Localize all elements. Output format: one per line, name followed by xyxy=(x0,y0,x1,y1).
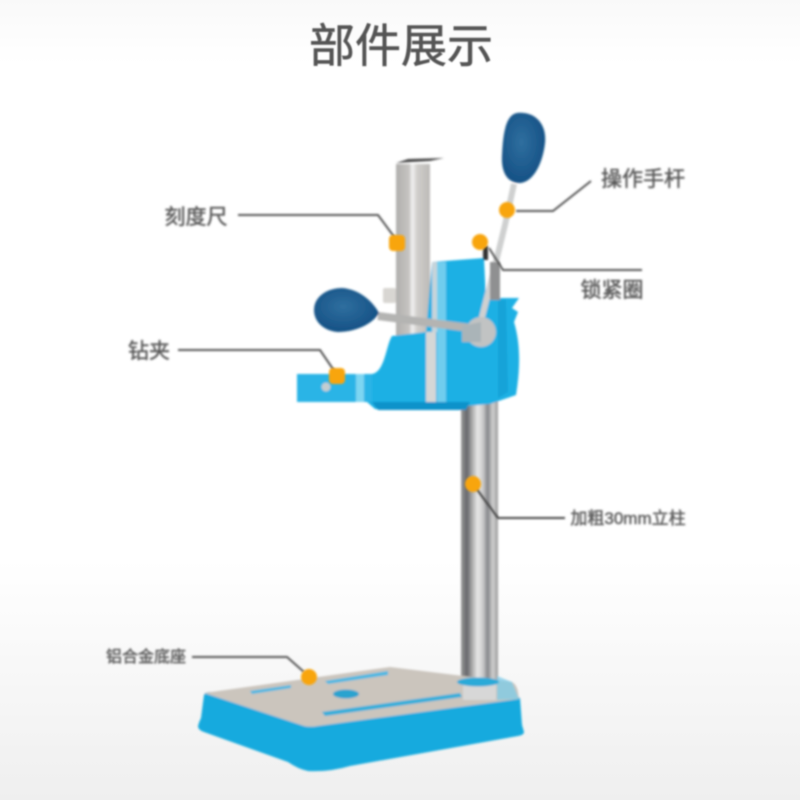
lever arms and hub xyxy=(378,184,514,347)
callout: 钻夹 xyxy=(128,340,345,384)
product: drill press stand xyxy=(198,113,545,771)
callout: 加粗30mm立柱 xyxy=(465,476,686,528)
blue carriage xyxy=(297,258,519,410)
round column xyxy=(461,400,498,680)
title: 部件展示 xyxy=(309,20,493,72)
blue ball handle: upper xyxy=(502,113,545,183)
callout: 加粗30mm立柱: 加粗30mm立柱 xyxy=(570,509,686,528)
callout: 操作手杆 xyxy=(499,168,685,218)
callout: 操作手杆: 操作手杆 xyxy=(601,168,685,191)
callout: 锁紧圈: 锁紧圈 xyxy=(580,279,644,302)
callout: 铝合金底座: 铝合金底座 xyxy=(106,648,186,666)
callout: 刻度尺 xyxy=(164,206,405,251)
square scale column xyxy=(383,158,444,339)
callout: 钻夹: 钻夹 xyxy=(128,340,170,363)
callout: 铝合金底座 xyxy=(106,648,317,685)
callout: 锁紧圈 xyxy=(472,234,644,302)
aluminium base xyxy=(198,667,524,771)
blue ball handle: left xyxy=(314,288,379,332)
callout: 刻度尺: 刻度尺 xyxy=(164,206,228,229)
